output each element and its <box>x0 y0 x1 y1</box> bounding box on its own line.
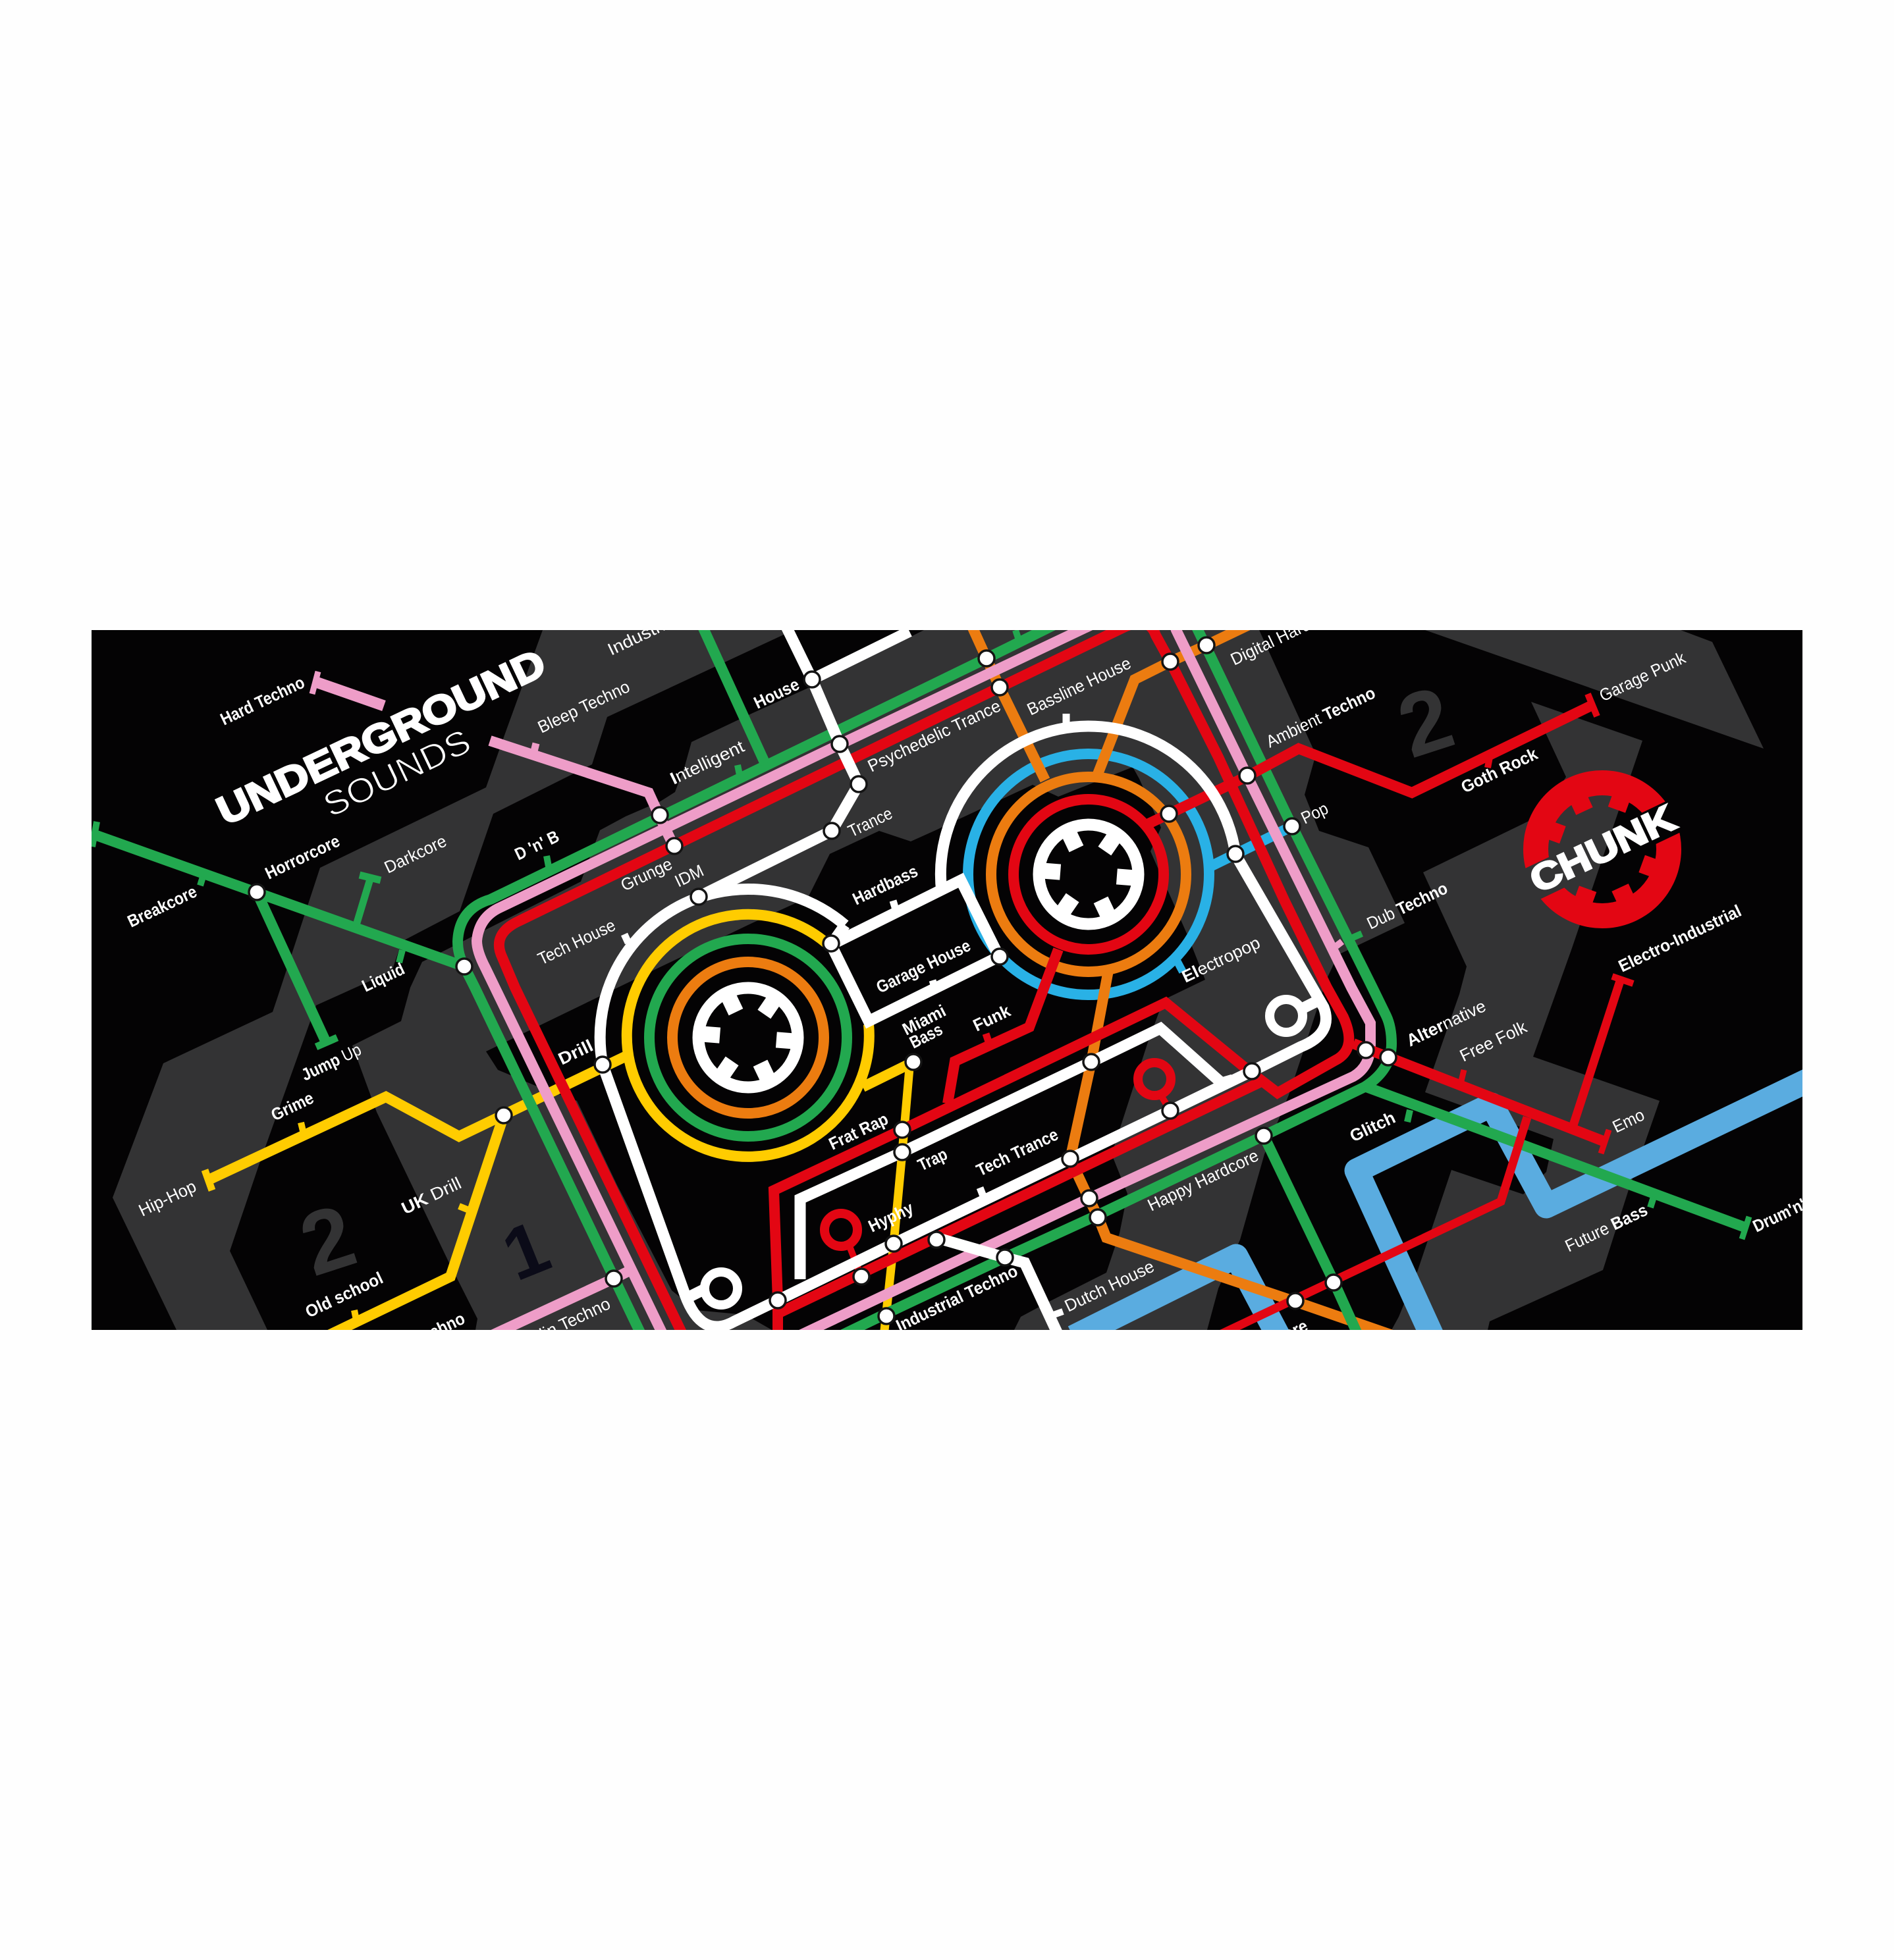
label: Hyphy: Hyphy <box>865 1198 917 1236</box>
label: Miami Bass: Miami <box>899 1001 949 1039</box>
cassette reel hub right <box>1039 824 1138 924</box>
grey background districts <box>113 630 1764 1330</box>
cyan line: right reel ring <box>968 754 1292 995</box>
label: Emo: Emo <box>1610 1105 1648 1136</box>
label: Dutch House: Dutch House <box>1062 1256 1157 1315</box>
label: Goth Rock: Goth Rock <box>1458 743 1541 797</box>
label: Funk: Funk <box>970 1001 1014 1035</box>
label: Hardcore (cropped): Hardcore <box>1240 1315 1311 1363</box>
label: Breakcore: Breakcore <box>124 882 200 931</box>
wide light blue line <box>1073 1076 1818 1337</box>
label: Techno (cropped): Techno <box>411 1308 468 1349</box>
label: Frat Rap: Frat Rap <box>826 1109 891 1153</box>
pink line <box>312 593 1370 1337</box>
label: D 'n' B: D 'n' B <box>512 826 562 864</box>
label: Drill: Drill <box>555 1036 596 1069</box>
label: Trap: Trap <box>915 1144 950 1175</box>
label: Happy Hardcore: Happy Hardcore <box>1145 1146 1262 1215</box>
label: Electro-Industrial: Electro-Industrial <box>1615 901 1745 976</box>
label: Hip-Hop: Hip-Hop <box>136 1176 200 1220</box>
label: Psychedelic Trance: Psychedelic Trance <box>865 696 1004 776</box>
label: Industrial Techno: Industrial Techno <box>893 1261 1021 1335</box>
logo: Chunk: CHUNK <box>1523 797 1681 901</box>
label: Bleep Techno: Bleep Techno <box>535 676 633 737</box>
green line <box>92 578 1749 1337</box>
label: Hardbass: Hardbass <box>850 861 921 909</box>
label: Pop: Pop <box>1298 798 1331 828</box>
title: Underground: UNDERGROUND <box>210 641 552 834</box>
label: IDM: IDM <box>672 861 707 891</box>
label: Dub Techno: Dub Techno <box>1364 878 1451 933</box>
label: Miami Bass: Bass <box>906 1019 946 1052</box>
label: Electropop: Electropop <box>1179 932 1263 986</box>
label: Digital Hardcore: Digital Hardcore <box>1228 600 1343 669</box>
black cassette interior <box>486 767 1205 1330</box>
label: Berlin Techno (cropped): Berlin Techno <box>513 1294 613 1355</box>
title: Sounds: SOUNDS <box>317 722 477 825</box>
label: Industrial: Industrial <box>605 609 681 659</box>
label: House: House <box>751 674 802 712</box>
interchange stations <box>249 637 1396 1324</box>
label: Ambient Techno: Ambient Techno <box>1263 683 1378 751</box>
zone number 1: 1 <box>491 1205 560 1296</box>
label: Darkcore: Darkcore <box>381 831 450 877</box>
yellow line <box>205 914 913 1337</box>
label: Intelligent: Intelligent <box>667 736 748 788</box>
label: Hard Techno: Hard Techno <box>217 672 308 729</box>
label: Garage Punk: Garage Punk <box>1596 647 1689 705</box>
label: Jump Up: Jump Up <box>298 1040 364 1084</box>
label: Bassline House: Bassline House <box>1024 653 1134 719</box>
label: Drum'n'Bass: Drum'n'Bass <box>1750 1179 1841 1236</box>
logo: Chunk <box>1523 770 1681 928</box>
label: Alternative: Alternative <box>1403 995 1489 1050</box>
label: Grunge: Grunge <box>618 854 675 895</box>
orange line <box>672 622 1396 1337</box>
label: Grime: Grime <box>268 1088 317 1125</box>
label: Glitch: Glitch <box>1347 1107 1398 1146</box>
label: Horrorcore: Horrorcore <box>262 831 343 883</box>
label: Future Bass: Future Bass <box>1562 1200 1650 1256</box>
label: Tech House: Tech House <box>535 915 618 968</box>
zone number 2 right: 2 <box>1386 667 1465 777</box>
panel: underground map <box>92 630 1802 1330</box>
cassette reel hub left <box>698 988 798 1088</box>
label: Trance: Trance <box>845 803 896 841</box>
label: UK Drill: UK Drill <box>398 1173 464 1218</box>
label: Old school: Old school <box>302 1268 386 1321</box>
label: Garage House: Garage House <box>873 936 973 997</box>
panel background <box>92 630 1802 1330</box>
label: Free Folk: Free Folk <box>1457 1017 1530 1065</box>
red line <box>499 623 1633 1338</box>
label: Liquid: Liquid <box>359 959 408 995</box>
white cassette outline line <box>600 625 1326 1337</box>
label: Tech Trance: Tech Trance <box>973 1125 1062 1180</box>
zone number 2 left: 2 <box>288 1185 367 1295</box>
